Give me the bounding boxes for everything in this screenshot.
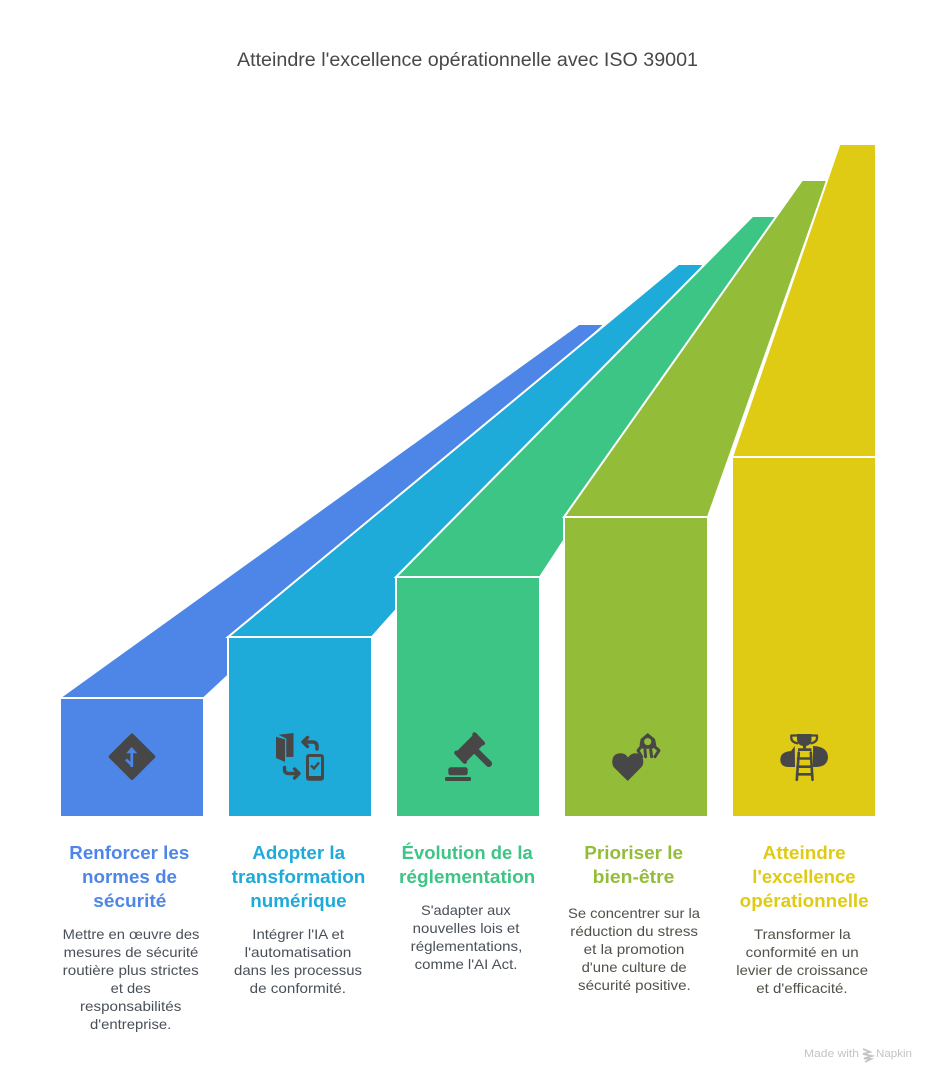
description: d'entreprise. (90, 1016, 171, 1032)
description: de conformité. (250, 980, 346, 996)
heading: Atteindre (763, 843, 846, 863)
description: S'adapter aux (421, 902, 511, 918)
ribbon: green (396, 216, 777, 577)
description: et la promotion (584, 941, 684, 957)
description: et d'efficacité. (756, 980, 848, 996)
description: responsabilités (80, 998, 181, 1014)
heading: l'excellence (752, 867, 856, 887)
heading: Renforcer les (69, 843, 189, 863)
description: Se concentrer sur la (568, 905, 700, 921)
description: réduction du stress (570, 923, 698, 939)
footer: made with napkin: Napkin (876, 1048, 912, 1060)
heading (584, 843, 683, 887)
description: comme l'AI Act. (415, 956, 517, 972)
heading: Prioriser le (584, 843, 683, 863)
icon: door and phone exchange (276, 733, 324, 781)
description (568, 905, 700, 993)
heading: normes de (82, 867, 177, 887)
footer: made with napkin: Made with (804, 1048, 859, 1060)
ribbon: olive (564, 180, 828, 517)
block: yellow (732, 457, 876, 817)
icon: gavel (445, 734, 489, 781)
block: blue (60, 698, 204, 817)
icon: heart and claw (612, 733, 659, 781)
description: Transformer la (754, 926, 851, 942)
heading (740, 843, 869, 911)
description: et des (111, 980, 151, 996)
heading (399, 842, 535, 887)
description: réglementations, (411, 938, 522, 954)
block: olive (564, 517, 708, 817)
description (736, 926, 868, 996)
description: l'automatisation (245, 944, 351, 960)
ribbon: cyan (228, 264, 704, 637)
step 4: prioriser le bien-être (564, 180, 828, 993)
step 3: évolution de la réglementation (396, 216, 777, 972)
heading (69, 843, 189, 911)
heading: bien-être (593, 867, 674, 887)
description (234, 926, 362, 996)
heading (232, 843, 365, 911)
description: Intégrer l'IA et (252, 926, 344, 942)
heading: Adopter la (252, 843, 346, 863)
description: mesures de sécurité (64, 944, 199, 960)
ribbon: yellow (732, 144, 876, 457)
description: sécurité positive. (578, 977, 691, 993)
description: conformité en un (746, 944, 859, 960)
step 2: adopter la transformation numérique (228, 264, 704, 996)
step 1: renforcer les normes de sécurité (60, 324, 605, 1032)
description: levier de croissance (736, 962, 868, 978)
heading: transformation (232, 867, 365, 887)
description (63, 926, 199, 1032)
block: cyan (228, 637, 372, 817)
description: d'une culture de (582, 959, 687, 975)
block: green (396, 577, 540, 817)
description: dans les processus (234, 962, 362, 978)
heading: réglementation (399, 867, 535, 887)
footer: made with napkin (804, 1048, 912, 1062)
icon: road sign diamond (108, 733, 156, 781)
heading: Évolution de la (402, 842, 534, 863)
heading: opérationnelle (740, 891, 869, 911)
ribbon: blue (60, 324, 605, 698)
description (411, 902, 522, 972)
description: routière plus strictes (63, 962, 199, 978)
description: Mettre en œuvre des (63, 926, 199, 942)
heading: sécurité (93, 891, 166, 911)
heading: numérique (250, 891, 347, 911)
description: nouvelles lois et (413, 920, 520, 936)
title: Atteindre l'excellence opérationnelle avec ISO 39001 (237, 50, 698, 71)
step 5: atteindre l'excellence opérationnelle (732, 144, 876, 996)
icon: trophy, ladder and bags (780, 734, 828, 780)
